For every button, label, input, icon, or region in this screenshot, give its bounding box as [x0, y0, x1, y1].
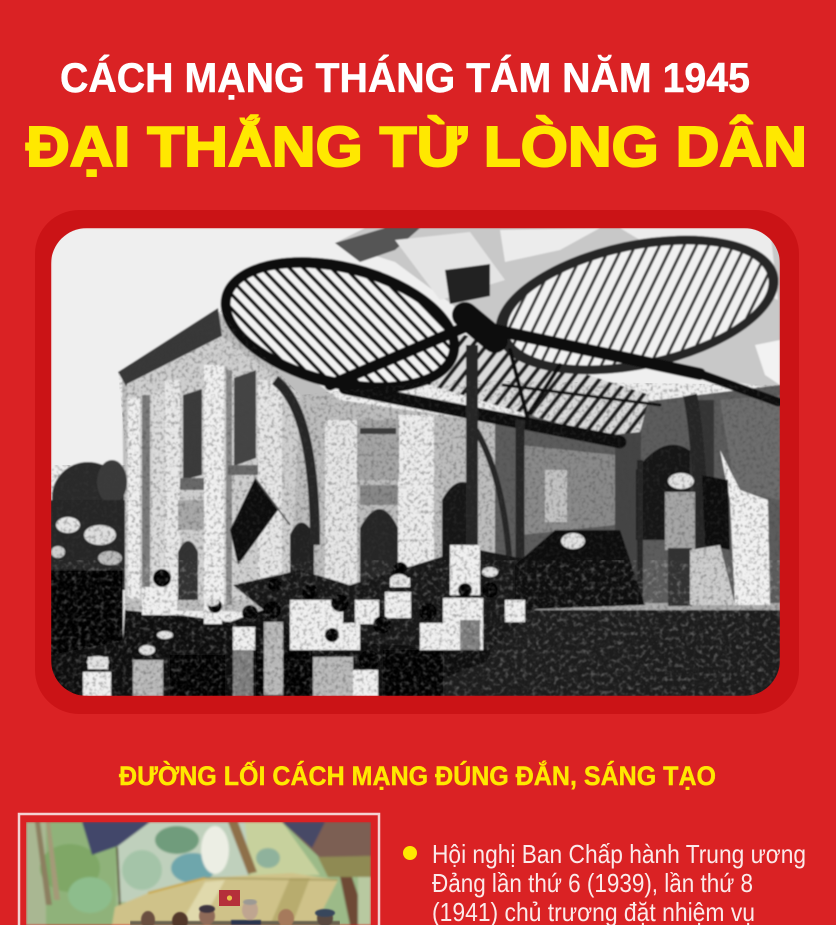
upper building behind canopy: [335, 228, 780, 390]
bullet text: [432, 839, 806, 925]
crowd upper band: [233, 548, 545, 650]
dark tent flaps: [82, 822, 150, 855]
canopy beams: [330, 315, 778, 442]
central walls: [325, 420, 357, 590]
flag star: [227, 895, 232, 901]
trees on left: [51, 461, 125, 502]
right trunk: [339, 876, 360, 925]
people on terrace: [515, 530, 645, 610]
grain over building and crowd: [51, 310, 780, 696]
crowd figures: [83, 545, 525, 696]
title line: revolution name: CÁCH MẠNG THÁNG TÁM NĂM 1945: [60, 54, 750, 101]
photo frame: [35, 210, 799, 714]
glass fan behind canopy: [426, 334, 650, 436]
title line: main slogan: ĐẠI THẮNG TỪ LÒNG DÂN: [26, 114, 807, 179]
canopy pillars: [275, 345, 705, 600]
trunks and pole: [228, 822, 257, 874]
windows: [183, 389, 202, 480]
photo panel: crowd at Hanoi Opera House: [35, 210, 799, 714]
figures: [130, 899, 340, 925]
painting white frame: [19, 814, 379, 925]
hedge: [442, 608, 780, 696]
flag: [219, 890, 240, 906]
main building facade: [122, 312, 496, 613]
painting: [26, 822, 371, 925]
bullet marker: [403, 846, 417, 860]
crowd base: [51, 600, 490, 696]
tent canopy: [112, 873, 338, 925]
section heading: ĐƯỜNG LỐI CÁCH MẠNG ĐÚNG ĐẮN, SÁNG TẠO: [119, 759, 716, 791]
photo: [51, 212, 791, 696]
bullet text: Đảng lần thứ 6 (1939), lần thứ 8: [432, 868, 753, 898]
left oval canopy: [220, 256, 460, 394]
arched doors: [178, 541, 198, 600]
black flag: [230, 478, 278, 565]
right inner hall: [495, 385, 780, 610]
painting panel: Ho Chi Minh with comrades: [19, 814, 379, 925]
right oval canopy: [495, 234, 780, 376]
